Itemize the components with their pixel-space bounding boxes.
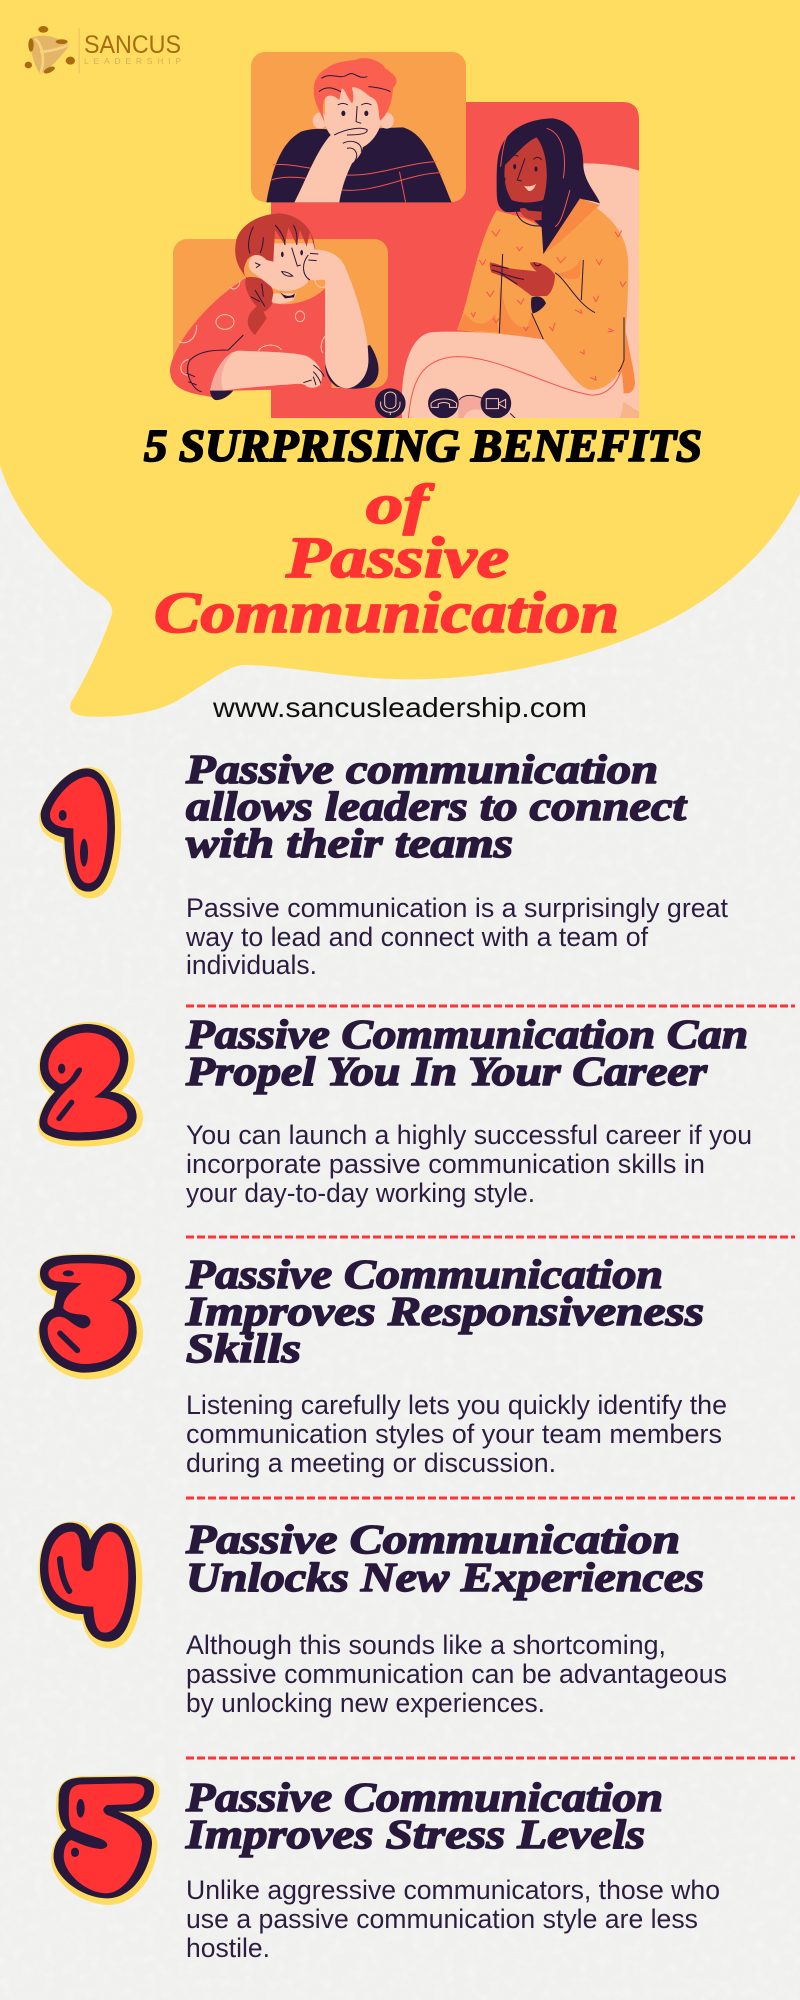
ears: [313, 113, 327, 129]
speech bubble header shape: [0, 0, 800, 717]
heading 4: [185, 1516, 704, 1600]
title line: communication: Communication: [154, 580, 619, 645]
website url: www.sancusleadership.com: [212, 692, 587, 723]
heading 1: with their teams: [186, 820, 513, 866]
cable backdrop: [458, 396, 482, 418]
woman on the right: [402, 118, 639, 418]
video button: [481, 388, 511, 418]
legs: [402, 332, 624, 418]
panel: benefit 4: [40, 1516, 727, 1718]
panel: benefit 3: [39, 1251, 727, 1478]
logo wordmark: SANCUS: [84, 31, 181, 59]
title line: passive: Passive: [285, 525, 509, 590]
body 5: use a passive communication style are less: [186, 1904, 698, 1934]
body 1: Passive communication is a surprisingly great: [186, 893, 728, 923]
shirt: [170, 278, 332, 399]
man with hand on chin: [266, 58, 452, 202]
heading 5: Passive Communication: [185, 1774, 663, 1820]
neck: [272, 293, 297, 303]
body 3: during a meeting or discussion.: [186, 1448, 556, 1478]
body 4: passive communication can be advantageous: [186, 1659, 727, 1689]
elbow cuff: [325, 345, 379, 389]
illustration: video call: [170, 52, 639, 418]
girl resting her head: [170, 213, 379, 400]
hang up button: [428, 388, 459, 418]
shirt: [266, 127, 452, 202]
body 5: [186, 1875, 720, 1963]
heading 4: Passive Communication: [185, 1516, 680, 1562]
red call panel: [271, 102, 639, 418]
body 4: by unlocking new experiences.: [186, 1688, 545, 1718]
eyes and nose: [341, 111, 345, 116]
panel: benefit 1: [41, 746, 728, 980]
title block: [144, 421, 702, 645]
body 2: [186, 1120, 752, 1208]
armchair: [583, 163, 639, 418]
arm and hand: [294, 135, 363, 202]
body 3: [186, 1390, 727, 1478]
hand: [490, 262, 555, 296]
sweater folds: [457, 198, 600, 339]
hair: [497, 118, 600, 254]
hair: [235, 213, 315, 277]
body 3: Listening carefully lets you quickly identify the: [186, 1390, 727, 1420]
sweater: [457, 198, 628, 390]
heading 1: allows leaders to connect: [186, 783, 688, 829]
heading 2: [185, 1011, 748, 1094]
call control buttons: [375, 388, 515, 418]
face: [249, 243, 315, 291]
left video tile: [173, 239, 388, 388]
heading 3: Skills: [186, 1325, 301, 1371]
face: [325, 87, 382, 150]
number 2: [39, 1024, 139, 1143]
raised arm: [314, 250, 368, 388]
body 5: hostile.: [186, 1933, 270, 1963]
body 4: [186, 1630, 727, 1718]
forearm: [210, 351, 322, 391]
sleeve shade: [618, 330, 635, 394]
neck: [520, 207, 542, 220]
body 2: You can launch a highly successful career if you: [186, 1120, 752, 1150]
braid: [245, 277, 273, 335]
logo tagline: LEADERSHIP: [84, 56, 181, 66]
heading 3: Passive Communication: [185, 1251, 663, 1297]
title line: of: of: [366, 474, 435, 536]
heading 5: Improves Stress Levels: [185, 1811, 645, 1857]
number 3: [39, 1255, 139, 1375]
body 2: your day-to-day working style.: [186, 1178, 535, 1208]
sleeve cuff: [531, 296, 546, 313]
heading 1: Passive communication: [185, 746, 658, 792]
heading 4: Unlocks New Experiences: [186, 1554, 704, 1600]
body 2: incorporate passive communication skills in: [186, 1149, 705, 1179]
hand on cheek: [304, 250, 320, 280]
heading 3: Improves Responsiveness: [185, 1288, 704, 1334]
body 4: Although this sounds like a shortcoming,: [186, 1630, 666, 1660]
connecting cable: [459, 395, 515, 418]
title line: 5 surprising benefits: 5 SURPRISING BENEFITS: [144, 421, 702, 471]
face: [504, 137, 547, 202]
hair: [314, 58, 397, 123]
panel: benefit 2: [39, 1011, 752, 1208]
body 1: [185, 893, 728, 980]
body 1: way to lead and connect with a team of: [185, 922, 648, 952]
microphone button: [375, 388, 406, 418]
heading 1: [185, 746, 688, 866]
body 1: individuals.: [186, 950, 317, 980]
heading 3: [185, 1251, 704, 1371]
heading 5: [185, 1774, 663, 1857]
number 5: [54, 1777, 156, 1901]
heading 2: Passive Communication Can: [185, 1011, 748, 1057]
top video tile: [251, 52, 466, 202]
heading 2: Propel You In Your Career: [185, 1048, 708, 1094]
number 1: [41, 768, 117, 894]
logo: Sancus Leadership: [25, 26, 181, 75]
panel: benefit 5: [54, 1774, 720, 1963]
body 5: Unlike aggressive communicators, those who: [186, 1875, 720, 1905]
facial features: [281, 252, 284, 257]
logo icon: [25, 26, 79, 75]
number 4: [40, 1523, 138, 1644]
body 3: communication styles of your team members: [186, 1419, 722, 1449]
